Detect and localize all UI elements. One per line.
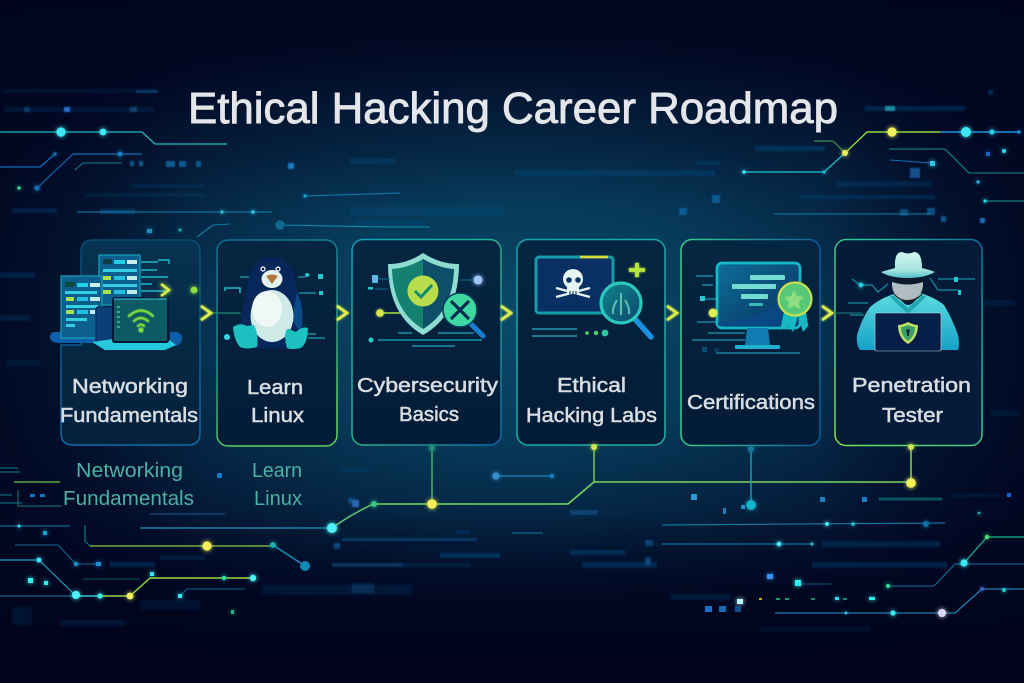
label: learn linux xyxy=(247,377,304,427)
card: linux xyxy=(217,240,337,446)
tablet xyxy=(96,307,113,343)
icon: networking servers, laptop and wifi xyxy=(50,255,197,354)
echo text: learn linux: Learn xyxy=(252,460,302,482)
feet xyxy=(233,324,258,348)
ribbon xyxy=(780,312,809,332)
stand xyxy=(745,328,770,345)
monitor bottom shading xyxy=(718,290,798,326)
background circuit traces right xyxy=(512,132,1024,613)
monitor text bars xyxy=(750,275,785,280)
hat xyxy=(881,252,935,278)
face xyxy=(262,270,282,288)
glowing dot xyxy=(474,276,482,284)
shadow dashes xyxy=(702,347,707,352)
lines and dots xyxy=(532,329,577,336)
laptop xyxy=(875,313,941,351)
label: networking fundamentals xyxy=(60,376,198,427)
echo text: networking fundamentals xyxy=(63,460,194,510)
penguin body xyxy=(240,257,304,349)
laptop screen xyxy=(113,298,168,342)
yellow dot xyxy=(376,309,384,317)
background circuit nodes left xyxy=(17,127,307,614)
monitor xyxy=(717,263,800,328)
icon: skull terminal and magnifier xyxy=(532,257,651,337)
echo text: learn linux: Linux xyxy=(254,488,302,510)
label: certifications: Certifications xyxy=(687,392,815,414)
label: networking fundamentals: Networking xyxy=(72,376,188,398)
blue node left xyxy=(300,561,310,571)
magnifier xyxy=(601,283,641,323)
background squares right xyxy=(691,493,1011,612)
title: Ethical Hacking Career Roadmap xyxy=(188,84,838,133)
eyes xyxy=(260,266,266,272)
arrows between steps xyxy=(201,306,832,320)
skull xyxy=(556,269,590,297)
icon: shield with check and magnifier xyxy=(368,253,483,346)
laptop shield xyxy=(898,322,918,344)
belly xyxy=(250,290,294,342)
step flow line xyxy=(170,312,862,314)
card: cybersecurity xyxy=(352,240,501,445)
label: penetration tester: Tester xyxy=(882,405,943,427)
magnifier handle xyxy=(470,323,483,336)
badge xyxy=(778,282,812,316)
hat shadow xyxy=(892,275,923,284)
label: ethical hacking labs: Hacking Labs xyxy=(526,405,657,427)
magnifier handle xyxy=(635,319,651,337)
base xyxy=(50,332,182,346)
left server xyxy=(61,276,102,338)
small side elements xyxy=(372,275,378,283)
card: labs xyxy=(517,240,665,445)
check badge xyxy=(408,276,438,306)
shield xyxy=(388,253,459,335)
icon: certification monitor xyxy=(692,263,812,353)
label: penetration tester xyxy=(852,375,971,427)
speed lines xyxy=(378,333,482,346)
shadow line xyxy=(85,353,162,355)
label: learn linux: Learn xyxy=(247,377,303,399)
collar xyxy=(890,295,926,314)
small blue dashes near echo text xyxy=(30,473,222,497)
desk glow xyxy=(845,354,971,356)
yellow dot xyxy=(709,309,717,317)
beak xyxy=(266,274,278,284)
x magnifier xyxy=(443,293,477,327)
echo text: learn linux xyxy=(252,460,302,510)
card: certifications xyxy=(681,240,820,446)
lens glyph xyxy=(613,293,629,315)
glowing dot xyxy=(191,287,197,293)
network lines xyxy=(848,278,975,315)
label: ethical hacking labs xyxy=(526,375,657,427)
icon: linux penguin xyxy=(224,257,325,349)
wifi symbol xyxy=(129,310,153,331)
echo text: networking fundamentals: Fundamentals xyxy=(63,488,194,510)
label: cybersecurity basics: Cybersecurity xyxy=(357,375,498,397)
card: networking xyxy=(61,240,200,445)
laptop base xyxy=(92,339,176,350)
server status lines xyxy=(141,260,170,291)
plus xyxy=(629,263,645,277)
echo text: networking fundamentals: Networking xyxy=(76,460,183,482)
face xyxy=(892,276,923,300)
label: ethical hacking labs: Ethical xyxy=(557,375,626,397)
terminal xyxy=(536,257,613,313)
icon: hacker with hat and laptop xyxy=(845,252,975,355)
label: networking fundamentals: Fundamentals xyxy=(60,405,198,427)
background data dashes xyxy=(0,89,1020,632)
connector lines below cards xyxy=(332,447,911,528)
label: cybersecurity basics: Basics xyxy=(399,404,459,426)
background circuit traces left xyxy=(0,132,430,596)
card: penetration tester xyxy=(835,240,982,446)
dim node top xyxy=(275,220,285,230)
label: penetration tester: Penetration xyxy=(852,375,971,397)
speed lines xyxy=(692,276,800,353)
body xyxy=(857,293,959,350)
back server xyxy=(99,255,140,305)
label: learn linux: Linux xyxy=(251,405,304,427)
connector nodes xyxy=(327,444,916,533)
small glowing arrow xyxy=(161,284,169,296)
motion lines xyxy=(240,275,325,338)
background circuit nodes right xyxy=(737,127,1021,617)
label: cybersecurity basics xyxy=(357,375,498,426)
